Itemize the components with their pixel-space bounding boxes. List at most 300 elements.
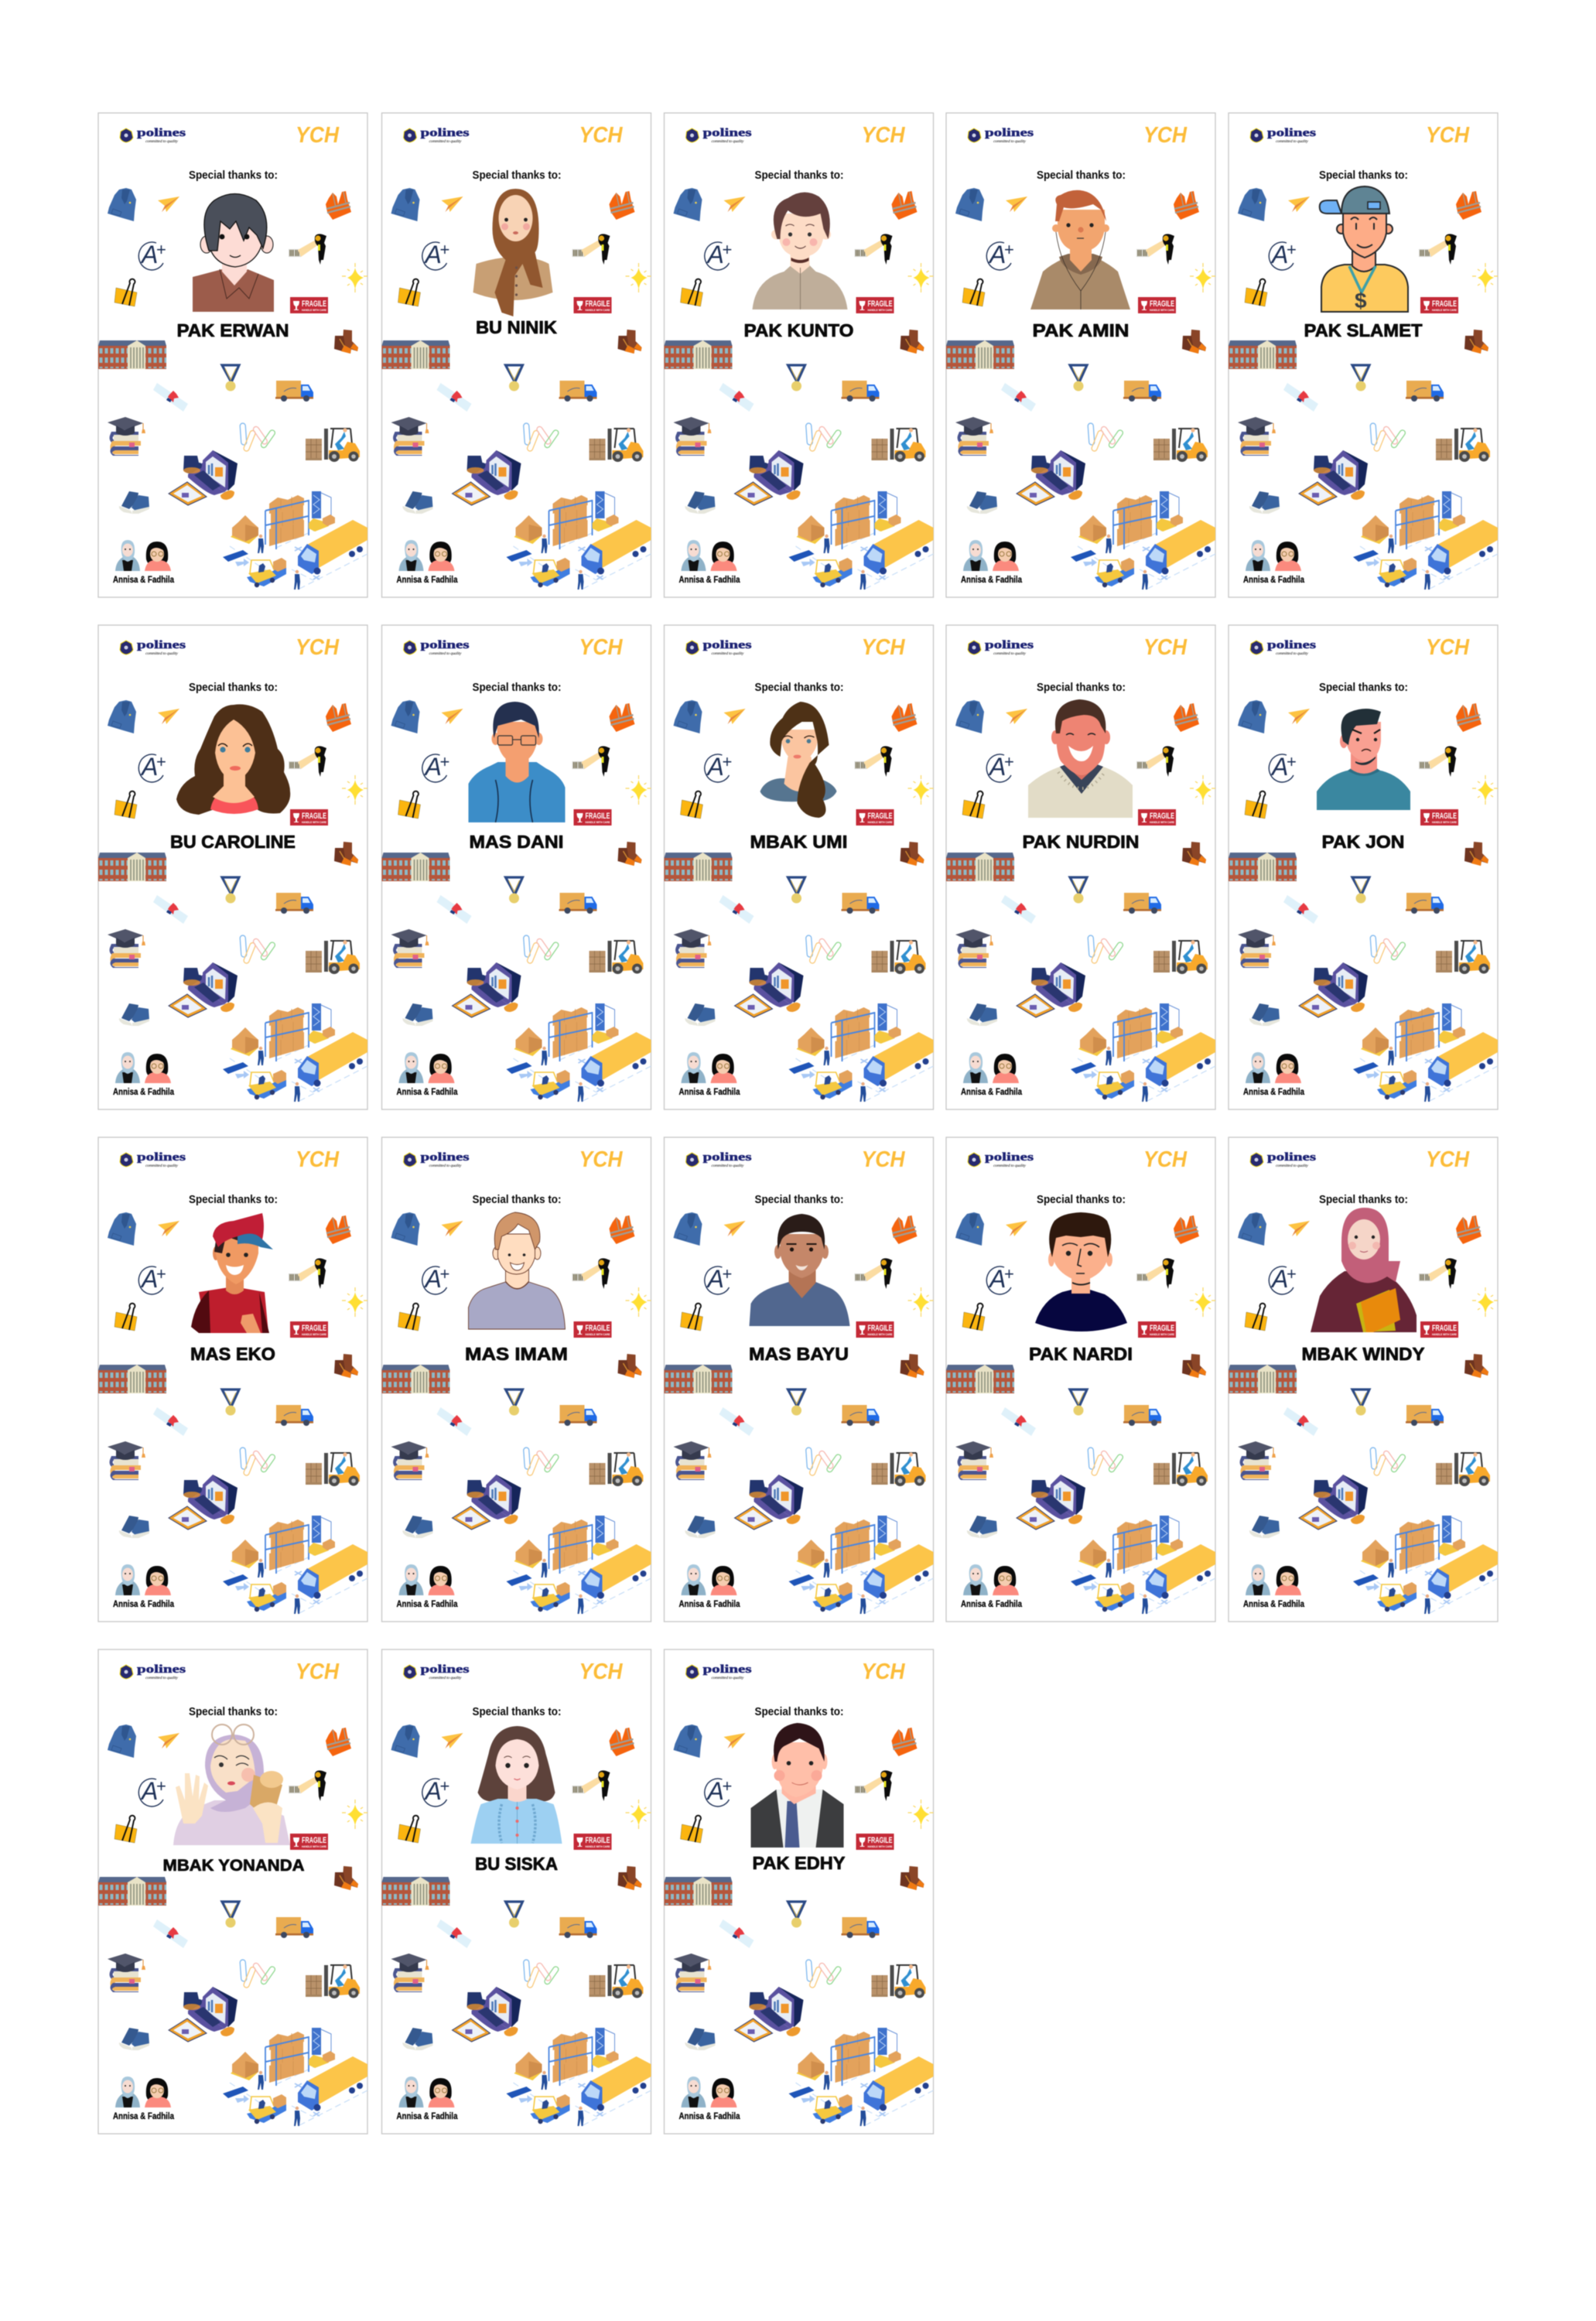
card frame (664, 625, 933, 1109)
icon: sparkle (1472, 1287, 1498, 1317)
portrait: Pak Slamet (1320, 186, 1408, 313)
icon: barcode scanner (1419, 1258, 1457, 1289)
icon: campus building (1229, 1365, 1297, 1393)
authors (113, 1564, 175, 1609)
illustration: warehouse (789, 1003, 933, 1102)
icon: boots (901, 1354, 924, 1378)
icon: fragile label: FRAGILE (585, 299, 610, 309)
icon: A+ grade: A (140, 1777, 158, 1805)
icon: fragile label (856, 809, 894, 826)
icon: safety vest (326, 1728, 351, 1756)
icon: forklift (590, 1452, 644, 1486)
icon: graduation cap and books (955, 417, 993, 456)
icon: barcode scanner (572, 1770, 610, 1801)
icon: blazer (955, 188, 984, 221)
icon: campus building (1229, 340, 1297, 369)
icon: graduation cap and books (391, 1954, 429, 1992)
portrait: Pak Slamet: $ (1355, 289, 1367, 313)
authors: Annisa & Fadhila (396, 1088, 458, 1097)
icon: fragile label: HANDLE WITH CARE (302, 308, 326, 312)
icon: campus building (1229, 853, 1297, 881)
illustration: warehouse (1353, 491, 1498, 590)
icon: A+ grade (705, 1264, 732, 1294)
icon: safety vest (326, 191, 351, 220)
authors (961, 1564, 1023, 1609)
logo: polines (120, 1151, 186, 1168)
icon: fragile label (856, 1321, 894, 1338)
card: Pak Erwan (98, 113, 367, 597)
icon: safety vest (610, 1728, 634, 1756)
illustration: warehouse (506, 491, 651, 590)
icon: diploma (719, 1919, 754, 1948)
authors: Annisa & Fadhila (113, 576, 175, 585)
icon: fragile label: HANDLE WITH CARE (585, 1844, 610, 1848)
icon: fragile label: HANDLE WITH CARE (585, 308, 610, 312)
logo: polines: committed to quality (145, 139, 179, 144)
icon: fragile label (1420, 809, 1458, 826)
icon: fragile label: HANDLE WITH CARE (868, 1844, 893, 1848)
heading: Special thanks to: (472, 1194, 562, 1206)
icon: sparkle (908, 775, 933, 805)
icon: A+ grade: + (723, 752, 732, 771)
icon: campus building (382, 1365, 450, 1393)
icon: fragile label: HANDLE WITH CARE (585, 1332, 610, 1336)
icon: fragile label: HANDLE WITH CARE (302, 1844, 326, 1848)
icon: barcode scanner (1136, 746, 1174, 777)
icon: sparkle (625, 1800, 651, 1829)
icon: paper plane (1006, 709, 1027, 724)
icon: A+ grade: A (988, 1265, 1006, 1293)
logo: polines (120, 639, 186, 656)
illustration: warehouse (223, 2028, 367, 2126)
portrait: Pak Kunto (752, 192, 848, 309)
logo: polines: committed to quality (1276, 1164, 1309, 1168)
icon: forklift (871, 1964, 925, 1998)
icon: campus building (382, 1877, 450, 1906)
icon: sneakers (119, 491, 149, 514)
icon: laptop desk (735, 962, 803, 1017)
authors (1243, 1052, 1305, 1097)
icon: fragile label: HANDLE WITH CARE (868, 820, 893, 824)
icon: fragile label: FRAGILE (302, 1836, 326, 1845)
icon: paper clips (806, 1448, 842, 1476)
logo: polines: polines (137, 639, 186, 651)
authors: Annisa & Fadhila (1243, 1088, 1305, 1097)
name: PAK AMIN (1032, 320, 1130, 340)
icon: paper clips (806, 1960, 842, 1988)
icon: boots (334, 842, 358, 866)
icon: paper clips (240, 1960, 276, 1988)
icon: forklift (590, 940, 644, 974)
authors (113, 540, 175, 585)
icon: paper plane (1288, 1221, 1310, 1236)
icon: graduation cap and books (108, 417, 145, 456)
logo: polines (404, 1151, 470, 1168)
icon: safety vest (1174, 703, 1199, 732)
icon: delivery truck (1123, 1405, 1161, 1426)
icon: delivery truck (559, 1917, 597, 1938)
icon: boots (1182, 1354, 1206, 1378)
portrait: Mas Eko (191, 1213, 273, 1333)
icon: graduation cap and books (673, 1441, 712, 1480)
icon: safety vest (326, 703, 351, 732)
icon: fragile label (290, 1834, 328, 1850)
icon: campus building (946, 853, 1014, 881)
icon: forklift (306, 428, 360, 462)
icon: paper clips (240, 1448, 276, 1476)
card frame (98, 1137, 367, 1622)
logo: ych: YCH (296, 1660, 340, 1684)
icon: paper clips (1088, 935, 1124, 964)
icon: paper clips (240, 935, 276, 964)
icon: paper clips (1370, 935, 1406, 964)
portrait: Pak Nardi (1035, 1212, 1127, 1331)
icon: binder clip (962, 1304, 985, 1331)
icon: delivery truck (1406, 381, 1444, 402)
heading: Special thanks to: (755, 682, 843, 694)
icon: sparkle (342, 1800, 367, 1829)
icon: sparkle (342, 1287, 367, 1317)
icon: blazer (391, 700, 419, 733)
icon: diploma (1283, 383, 1318, 412)
icon: campus building (98, 1365, 166, 1393)
icon: laptop desk (452, 962, 521, 1017)
icon: sparkle (908, 1800, 933, 1829)
icon: A+ grade: A (140, 753, 158, 781)
icon: sparkle (1190, 1287, 1215, 1317)
icon: delivery truck (1406, 1405, 1444, 1426)
icon: paper plane (1288, 709, 1310, 724)
heading: Special thanks to: (472, 169, 562, 182)
icon: fragile label: HANDLE WITH CARE (1150, 1332, 1174, 1336)
icon: forklift (306, 940, 360, 974)
icon: graduation cap and books (108, 1954, 145, 1992)
illustration: warehouse (506, 1003, 651, 1102)
logo: ych: YCH (296, 635, 340, 660)
name: PAK EDHY (752, 1853, 845, 1873)
icon: A+ grade: + (1287, 1264, 1297, 1284)
portrait: Bu Siska (470, 1726, 562, 1844)
icon: paper clips (1088, 423, 1124, 452)
icon: A+ grade (422, 1776, 449, 1807)
icon: A+ grade: A (140, 241, 158, 268)
icon: A+ grade: + (723, 1264, 732, 1284)
icon: A+ grade: A (424, 753, 442, 781)
icon: fragile label: HANDLE WITH CARE (1432, 820, 1457, 824)
name: PAK KUNTO (744, 320, 854, 340)
icon: safety vest (610, 1215, 634, 1244)
illustration: warehouse (1353, 1516, 1498, 1614)
icon: A+ grade (1269, 1264, 1297, 1294)
icon: A+ grade: A (706, 1777, 724, 1805)
logo: polines: polines (1267, 639, 1316, 651)
icon: diploma (436, 1919, 472, 1948)
heading: Special thanks to: (1319, 682, 1408, 694)
icon: paper plane (1006, 197, 1027, 212)
icon: delivery truck (275, 381, 313, 402)
icon: paper plane (158, 709, 179, 724)
icon: fragile label: FRAGILE (302, 812, 326, 821)
card: Bu Siska (382, 1649, 651, 2134)
icon: forklift (590, 1964, 644, 1998)
icon: diploma (1001, 895, 1036, 924)
logo: polines (685, 1151, 752, 1168)
card: Mas Bayu (664, 1137, 933, 1622)
logo: polines: committed to quality (712, 1676, 744, 1680)
name: BU CAROLINE (170, 832, 296, 852)
icon: boots (1464, 330, 1488, 354)
icon: boots (1464, 1354, 1488, 1378)
card: Mbak Windy (1229, 1137, 1498, 1622)
icon: binder clip (681, 279, 702, 306)
icon: A+ grade: A (988, 241, 1006, 268)
authors (396, 1564, 458, 1609)
icon: boots (334, 1866, 358, 1890)
portrait: Pak Nurdin (1028, 699, 1133, 818)
icon: A+ grade (138, 240, 166, 270)
authors: Annisa & Fadhila (1243, 576, 1305, 585)
card frame (1229, 1137, 1498, 1622)
card: Bu Caroline (98, 625, 367, 1109)
icon: A+ grade (422, 752, 449, 782)
icon: sparkle (908, 263, 933, 292)
icon: A+ grade: + (1004, 752, 1014, 771)
icon: barcode scanner (1419, 234, 1457, 265)
icon: boots (901, 330, 924, 354)
icon: fragile label: FRAGILE (868, 1324, 893, 1333)
icon: fragile label (1138, 1321, 1176, 1338)
icon: binder clip (398, 1816, 421, 1843)
icon: blazer (955, 1212, 984, 1246)
icon: A+ grade: A (988, 753, 1006, 781)
logo: ych: YCH (579, 123, 623, 148)
icon: diploma (719, 895, 754, 924)
icon: graduation cap and books (1238, 1441, 1276, 1480)
icon: forklift (590, 428, 644, 462)
icon: diploma (436, 383, 472, 412)
name: PAK SLAMET (1304, 320, 1422, 340)
icon: laptop desk (735, 1475, 803, 1530)
icon: boots (1182, 330, 1206, 354)
icon: fragile label: HANDLE WITH CARE (868, 308, 893, 312)
icon: barcode scanner (1419, 746, 1457, 777)
logo: polines (120, 1663, 186, 1680)
icon: safety vest (610, 703, 634, 732)
logo: polines: polines (702, 1151, 752, 1164)
card frame (98, 1649, 367, 2134)
icon: paper clips (806, 423, 842, 452)
logo: ych: YCH (1143, 1147, 1188, 1172)
logo: polines: polines (137, 1151, 186, 1164)
card: Pak Amin (946, 113, 1215, 597)
icon: binder clip (398, 279, 421, 306)
icon: laptop desk (735, 1987, 803, 2042)
card frame (1229, 625, 1498, 1109)
logo: ych: YCH (862, 123, 905, 148)
card: Bu Ninik (382, 113, 651, 597)
card: Mas Imam (382, 1137, 651, 1622)
logo: polines: polines (137, 1663, 186, 1676)
icon: blazer (1238, 188, 1266, 221)
logo: ych: YCH (1143, 635, 1188, 660)
logo: polines: polines (985, 1151, 1034, 1164)
icon: forklift (306, 1964, 360, 1998)
logo: ych: YCH (1426, 635, 1470, 660)
logo: polines: committed to quality (429, 1164, 462, 1168)
icon: medal (1352, 1390, 1369, 1416)
icon: medal (1070, 365, 1087, 391)
icon: fragile label: HANDLE WITH CARE (302, 820, 326, 824)
icon: blazer (1238, 700, 1266, 733)
card: Mbak Umi (664, 625, 933, 1109)
authors: Annisa & Fadhila (679, 576, 740, 585)
icon: medal (1352, 365, 1369, 391)
icon: fragile label: HANDLE WITH CARE (585, 820, 610, 824)
icon: fragile label (1138, 297, 1176, 313)
portrait: Bu Caroline (176, 704, 290, 815)
icon: blazer (108, 188, 136, 221)
icon: fragile label: FRAGILE (868, 299, 893, 309)
logo: polines: committed to quality (712, 651, 744, 656)
logo: polines (968, 1151, 1034, 1168)
icon: fragile label: FRAGILE (868, 1836, 893, 1845)
name: MAS BAYU (749, 1344, 849, 1364)
icon: sneakers (685, 2028, 715, 2050)
icon: medal (788, 877, 805, 904)
icon: barcode scanner (854, 1258, 893, 1289)
icon: campus building (382, 853, 450, 881)
logo: polines: committed to quality (993, 651, 1027, 656)
icon: paper clips (1370, 1448, 1406, 1476)
icon: safety vest (1174, 1215, 1199, 1244)
card frame (382, 1649, 651, 2134)
icon: fragile label: HANDLE WITH CARE (1150, 820, 1174, 824)
heading: Special thanks to: (472, 1706, 562, 1718)
icon: laptop desk (452, 450, 521, 505)
icon: fragile label (290, 809, 328, 826)
icon: A+ grade (138, 1264, 166, 1294)
icon: fragile label: FRAGILE (1432, 812, 1457, 821)
icon: paper plane (158, 1733, 179, 1748)
icon: binder clip (962, 279, 985, 306)
name: MBAK YONANDA (162, 1857, 305, 1875)
illustration: warehouse (1353, 1003, 1498, 1102)
icon: graduation cap and books (391, 929, 429, 968)
logo: polines: committed to quality (1276, 139, 1309, 144)
icon: sneakers (119, 1516, 149, 1538)
heading: Special thanks to: (1037, 1194, 1126, 1206)
icon: campus building (664, 1365, 732, 1393)
logo: polines: committed to quality (993, 1164, 1027, 1168)
icon: sneakers (1249, 1003, 1280, 1026)
card: Pak Edhy (664, 1649, 933, 2134)
icon: safety vest (891, 1215, 918, 1244)
illustration: warehouse (1071, 1003, 1215, 1102)
icon: barcode scanner (1136, 234, 1174, 265)
icon: sneakers (685, 491, 715, 514)
icon: paper clips (524, 1448, 559, 1476)
portrait: Pak Erwan (193, 193, 274, 312)
authors (679, 540, 740, 585)
icon: safety vest (891, 1728, 918, 1756)
icon: diploma (153, 895, 188, 924)
icon: fragile label: FRAGILE (1150, 1324, 1174, 1333)
logo: polines: polines (421, 1151, 470, 1164)
icon: A+ grade (138, 752, 166, 782)
logo: polines: polines (985, 127, 1034, 139)
icon: blazer (673, 1725, 702, 1758)
portrait: Mbak Umi (760, 702, 837, 818)
icon: A+ grade: + (156, 1776, 166, 1796)
icon: blazer (391, 1725, 419, 1758)
icon: sparkle (1190, 775, 1215, 805)
icon: safety vest (1456, 191, 1482, 220)
card: Mbak Yonanda (98, 1649, 367, 2134)
icon: A+ grade: + (156, 1264, 166, 1284)
icon: sparkle (625, 775, 651, 805)
icon: A+ grade: A (1270, 1265, 1288, 1293)
icon: sparkle (342, 263, 367, 292)
icon: fragile label (1138, 809, 1176, 826)
icon: fragile label: FRAGILE (302, 1324, 326, 1333)
icon: A+ grade: A (140, 1265, 158, 1293)
icon: A+ grade (1269, 752, 1297, 782)
icon: A+ grade: A (1270, 241, 1288, 268)
logo: polines (120, 127, 186, 144)
icon: diploma (153, 383, 188, 412)
logo: polines: committed to quality (429, 651, 462, 656)
icon: medal (788, 1390, 805, 1416)
icon: binder clip (681, 791, 702, 819)
card frame (946, 113, 1215, 597)
icon: boots (617, 842, 642, 866)
icon: fragile label: FRAGILE (1432, 299, 1457, 309)
authors (113, 1052, 175, 1097)
icon: A+ grade (986, 240, 1014, 270)
icon: sneakers (967, 1516, 997, 1538)
heading: Special thanks to: (1037, 169, 1126, 182)
icon: A+ grade: A (706, 753, 724, 781)
icon: sneakers (402, 1516, 433, 1538)
icon: diploma (153, 1919, 188, 1948)
icon: paper clips (806, 935, 842, 964)
heading: Special thanks to: (755, 1706, 843, 1718)
authors (961, 540, 1023, 585)
icon: binder clip (114, 1304, 137, 1331)
icon: delivery truck (1123, 381, 1161, 402)
icon: blazer (673, 188, 702, 221)
icon: fragile label: HANDLE WITH CARE (1150, 308, 1174, 312)
card: Pak Slamet (1229, 113, 1498, 597)
portrait: Bu Ninik (473, 189, 552, 316)
logo: polines: polines (702, 1663, 752, 1676)
icon: barcode scanner (1136, 1258, 1174, 1289)
card frame (664, 1649, 933, 2134)
icon: graduation cap and books (108, 1441, 145, 1480)
icon: forklift (1153, 428, 1208, 462)
icon: fragile label (1420, 1321, 1458, 1338)
logo: polines: committed to quality (429, 139, 462, 144)
card frame (664, 1137, 933, 1622)
icon: fragile label (856, 1834, 894, 1850)
icon: laptop desk (1017, 962, 1085, 1017)
icon: boots (334, 330, 358, 354)
card: Pak Jon (1229, 625, 1498, 1109)
heading: Special thanks to: (755, 169, 843, 182)
icon: medal (506, 877, 523, 904)
icon: paper clips (524, 423, 559, 452)
icon: medal (1352, 877, 1369, 904)
